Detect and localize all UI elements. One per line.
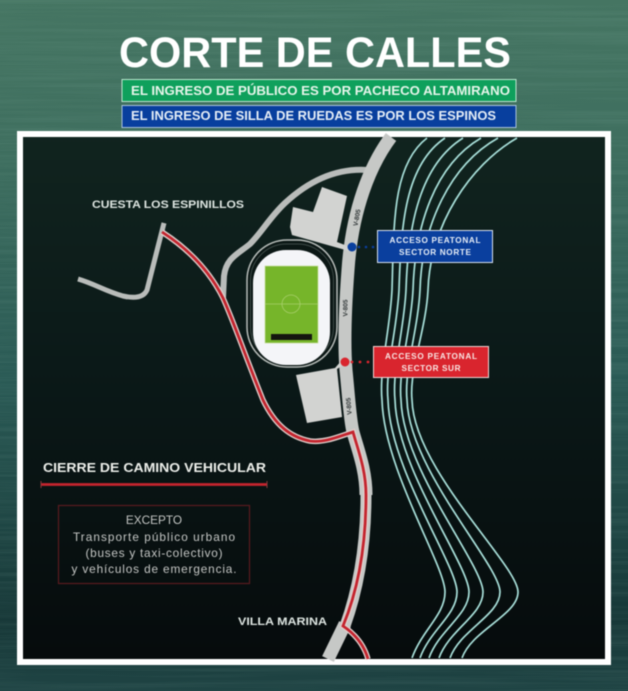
road labels: V-805: V-805 [342, 299, 350, 316]
road: west branch Cuesta Los Espinillos [78, 223, 164, 297]
callout: south pedestrian access: ACCESO PEATONAL [385, 352, 477, 361]
river lines [381, 138, 518, 658]
banner: wheelchair entrance [122, 106, 516, 128]
road: stadium connector [223, 170, 368, 298]
callout: north pedestrian access [378, 230, 492, 262]
legend: closed road: CIERRE DE CAMINO VEHICULAR [43, 460, 267, 475]
map panel [20, 134, 608, 662]
road labels: V-805: V-805 [345, 397, 354, 415]
banner: wheelchair entrance: EL INGRESO DE SILLA DE RUEDAS ES POR LOS ESPINOS [131, 108, 496, 123]
callout: south pedestrian access: SECTOR SUR [402, 364, 461, 373]
note box: exceptions: Transporte público urbano [73, 530, 235, 544]
note box: exceptions [58, 506, 250, 584]
title: CORTE DE CALLES [119, 29, 511, 77]
callout: north pedestrian access: SECTOR NORTE [399, 248, 472, 257]
note box: exceptions: EXCEPTO [126, 513, 182, 527]
note box: exceptions: (buses y taxi-colectivo) [86, 546, 223, 560]
callout: south pedestrian access [374, 346, 488, 378]
road: V-805 main road [328, 137, 391, 659]
marker: north access [348, 242, 374, 252]
banner: public entrance: EL INGRESO DE PÚBLICO ES POR PACHECO ALTAMIRANO [131, 83, 510, 98]
road labels: V-805 [342, 208, 363, 415]
pitch [265, 266, 318, 343]
legend: closed road [41, 460, 267, 488]
closed road: red line [162, 232, 368, 659]
road labels: V-805: V-805 [353, 208, 363, 227]
banner: public entrance [122, 80, 516, 102]
note box: exceptions: y vehículos de emergencia. [72, 562, 236, 576]
building: north parking [290, 187, 350, 251]
stand bar [271, 334, 312, 340]
label: Villa Marina: VILLA MARINA [238, 616, 327, 628]
callout: north pedestrian access: ACCESO PEATONAL [390, 236, 480, 245]
marker: south access [340, 358, 369, 366]
building: south parking [296, 360, 345, 423]
stadium [247, 240, 337, 367]
label: Cuesta Los Espinillos: CUESTA LOS ESPINILLOS [92, 199, 244, 211]
